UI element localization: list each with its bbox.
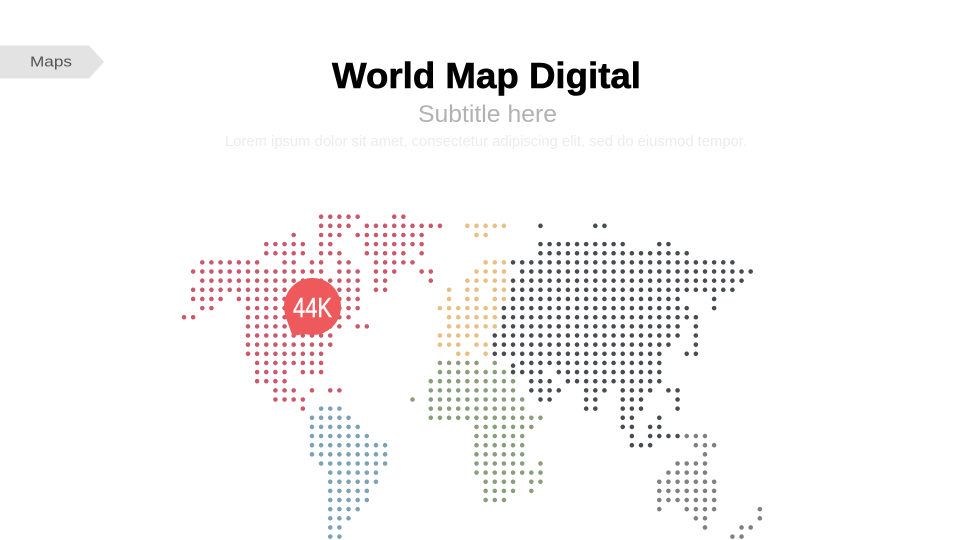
region: Oceania dots bbox=[659, 436, 760, 537]
region: Africa dots bbox=[412, 363, 541, 500]
section tab: Maps: Maps bbox=[30, 54, 72, 70]
subtitle: Subtitle here bbox=[418, 101, 557, 128]
section tab: Maps bbox=[0, 46, 104, 78]
region: Asia dots bbox=[495, 226, 751, 445]
callout: 44K bubble: 44K bbox=[293, 292, 332, 323]
title: World Map Digital bbox=[332, 55, 641, 96]
dotted world map bbox=[184, 217, 760, 537]
region: Europe dots bbox=[440, 226, 504, 354]
region: North America dots bbox=[184, 217, 440, 409]
region: South America dots bbox=[312, 409, 385, 537]
description text: Lorem ipsum dolor sit amet, consectetur adipiscing elit, sed do eiusmod tempor. bbox=[225, 133, 747, 150]
callout: 44K bubble bbox=[284, 278, 341, 336]
